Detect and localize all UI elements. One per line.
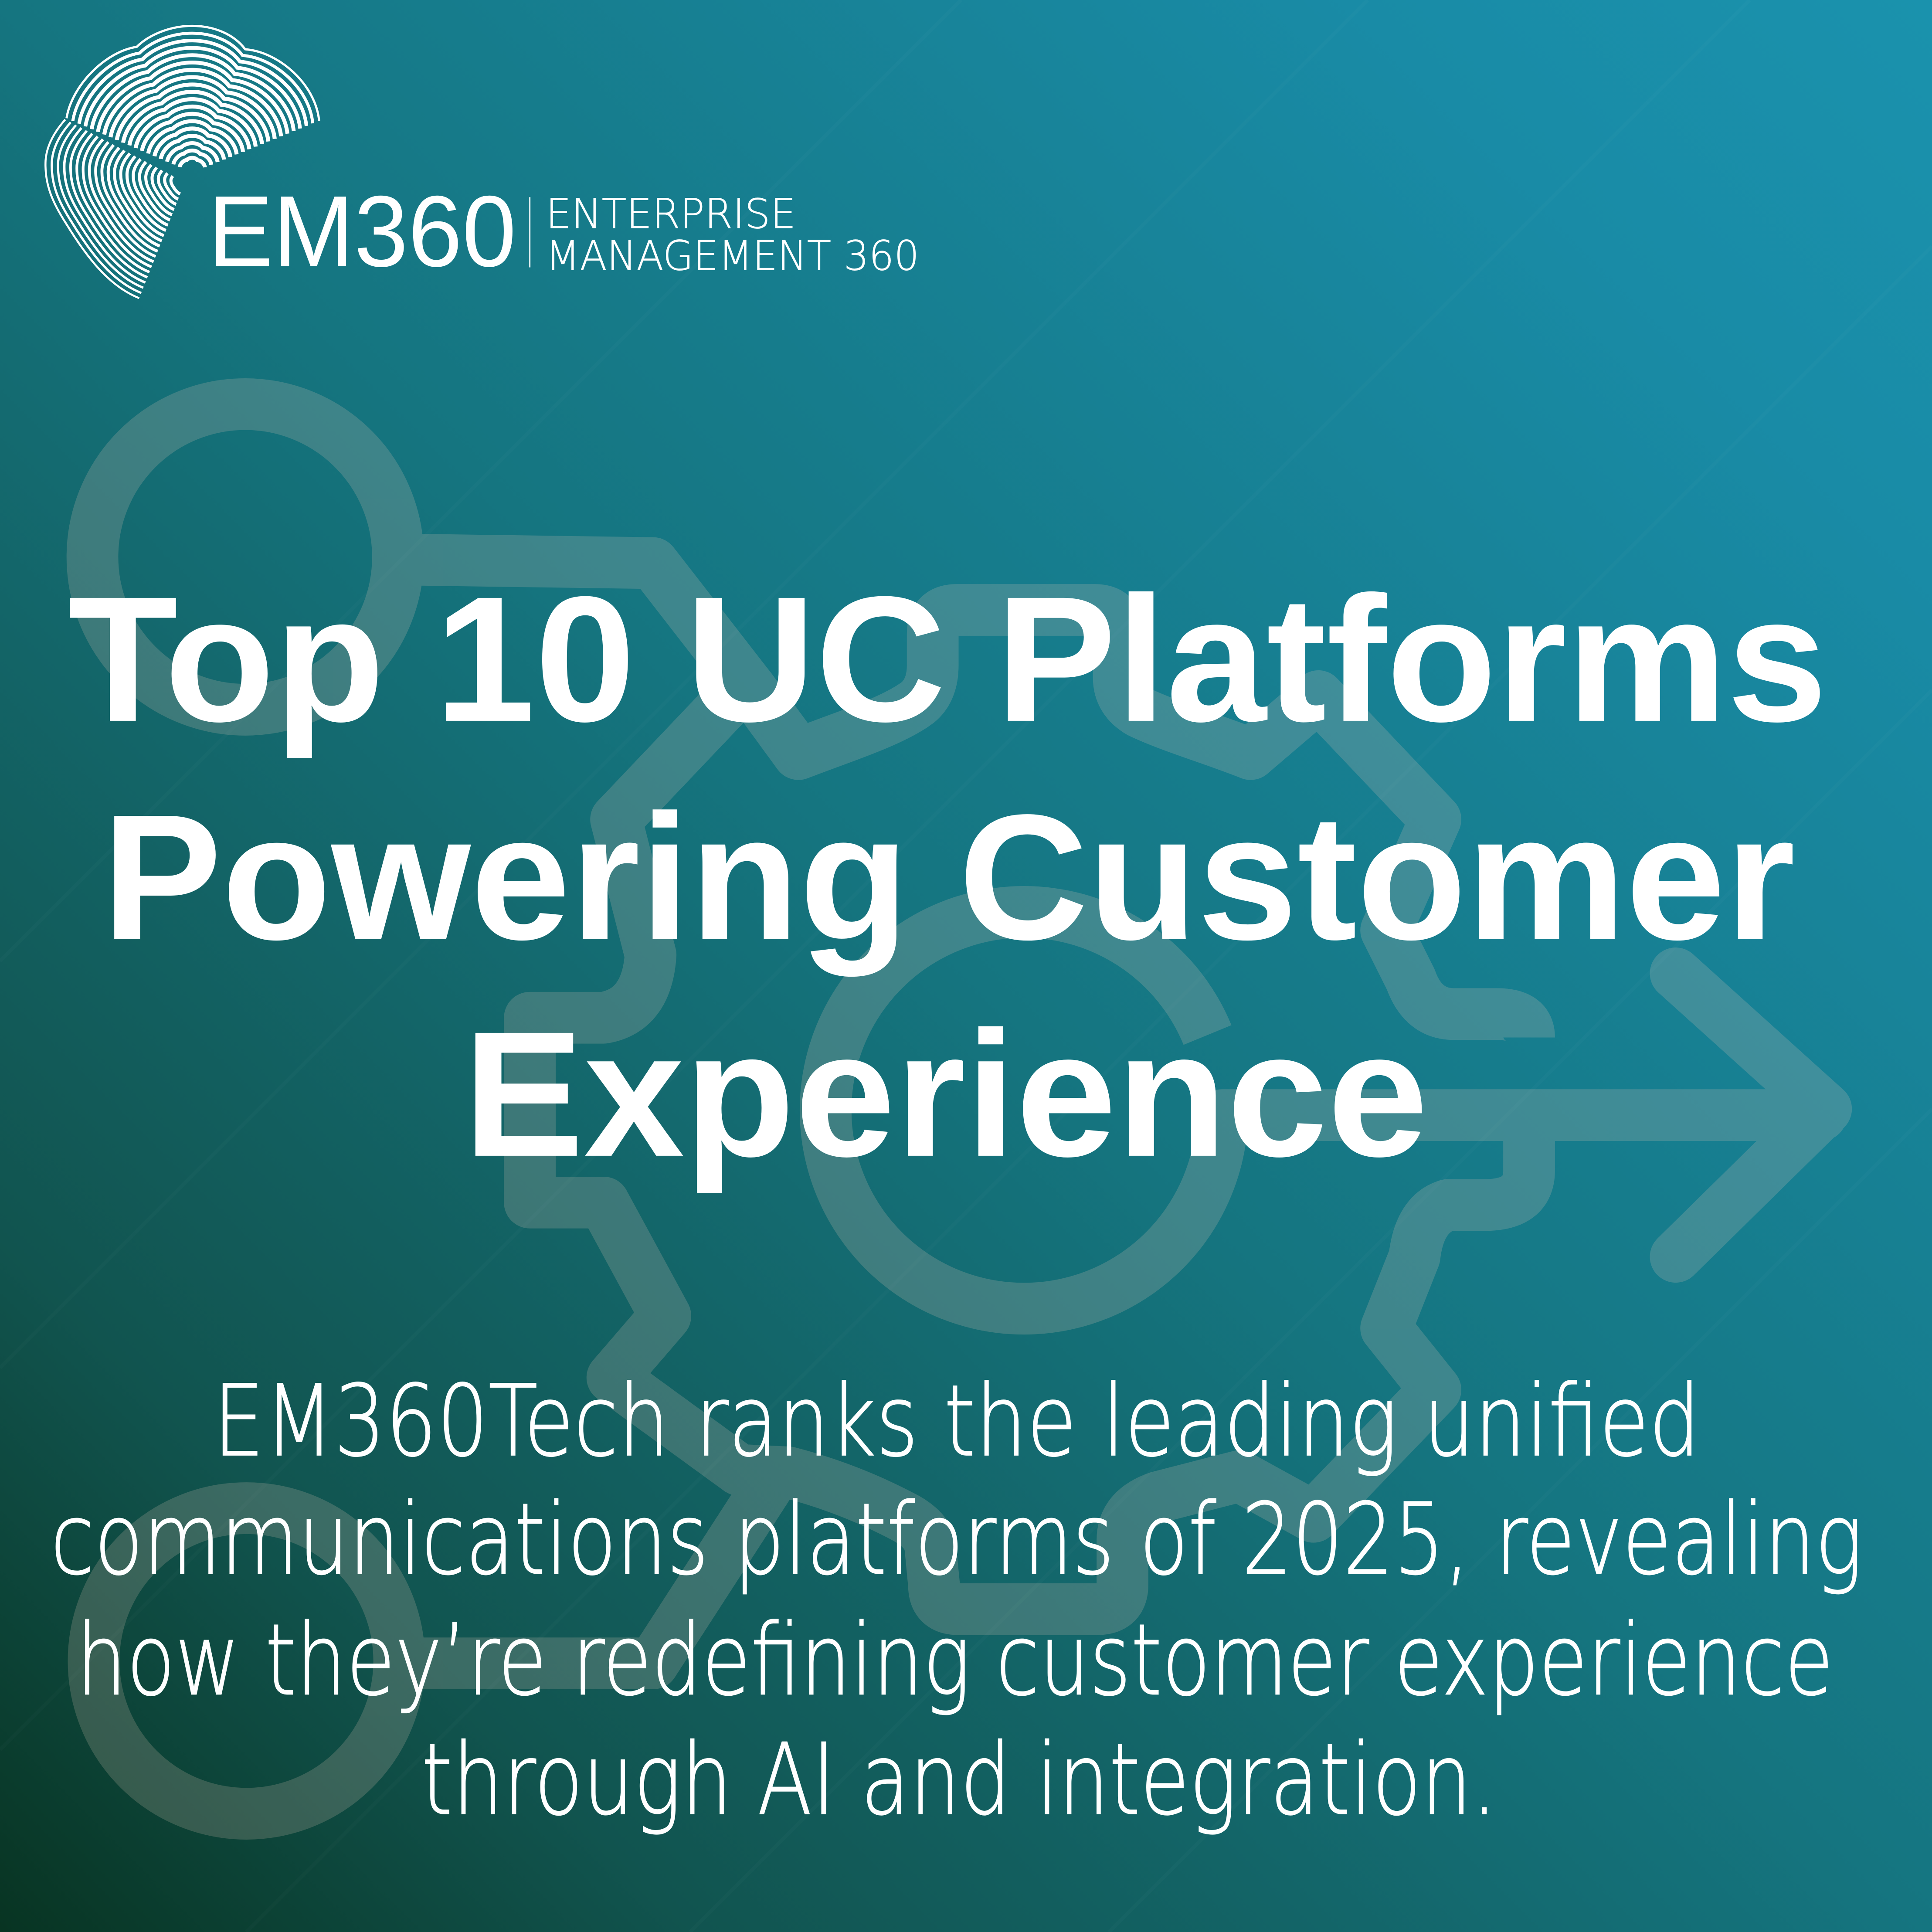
icon: gear outline with connectors (394, 560, 1529, 1664)
logo wordmark: EM360 (208, 175, 516, 288)
logo tagline: MANAGEMENT 360 (546, 232, 919, 280)
icon: watermark gear network with arrow (92, 404, 1826, 1814)
logo divider (529, 197, 530, 267)
logo mark: concentric cloud rings (45, 26, 319, 298)
description text block (51, 1364, 1863, 1837)
icon: bottom-left node circle (94, 1508, 399, 1814)
title: Top 10 UC Platforms (68, 559, 1827, 760)
icon: centre circle arc (825, 912, 1222, 1309)
icon: arrow (1222, 973, 1826, 1257)
logo tagline (546, 190, 919, 280)
description text block: through AI and integration. (421, 1723, 1497, 1837)
icon: top-left node circle (92, 404, 398, 710)
title: Powering Customer (102, 777, 1795, 978)
logo tagline: ENTERPRISE (546, 190, 796, 238)
title (68, 559, 1827, 1195)
title: Experience (463, 994, 1428, 1195)
logo: EM360 Enterprise Management 360 (45, 26, 919, 298)
